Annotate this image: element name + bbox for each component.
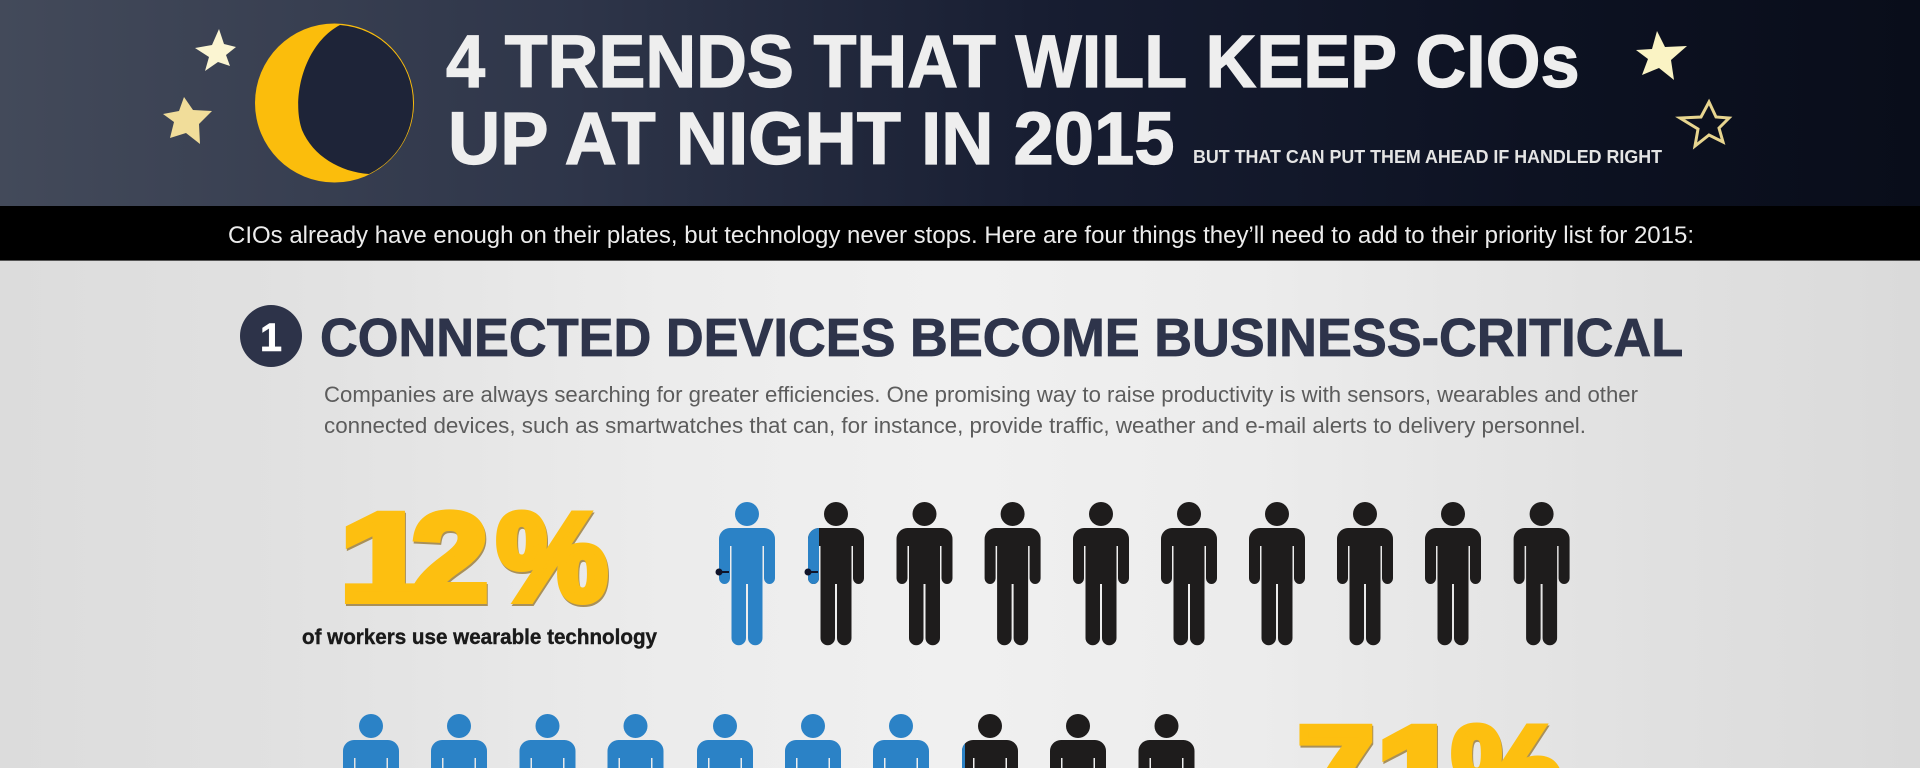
section heading: CONNECTED DEVICES BECOME BUSINESS-CRITICAL: [320, 308, 1683, 368]
subtitle: BUT THAT CAN PUT THEM AHEAD IF HANDLED RIGHT: [1193, 147, 1662, 167]
icon: star top left: [195, 29, 236, 71]
caption: wearable technology: of workers use wearable technology: [302, 626, 657, 649]
icon: star bottom left: [163, 97, 212, 144]
section description: Companies are always searching for greater efficiencies. One promising way to raise productivity is with sensors, wearables and other: [324, 382, 1638, 407]
title: UP AT NIGHT IN 2015: [448, 97, 1175, 180]
title: 4 TRENDS THAT WILL KEEP CIOs: [446, 21, 1580, 103]
section description: connected devices, such as smartwatches that can, for instance, provide traffic, weather and e-mail alerts to delivery personnel.: [324, 413, 1586, 438]
pictogram row: 12 percent of workers: [716, 502, 1570, 645]
number badge: [240, 305, 302, 367]
stat: 71%: [1298, 701, 1562, 768]
stat: 12%: 2: [412, 488, 488, 627]
stat: 12%: %: [497, 489, 607, 627]
section description: [324, 382, 1638, 438]
light background: [0, 261, 1920, 768]
title: [446, 21, 1580, 180]
pictogram row: 71 percent: [343, 714, 1194, 768]
icon: crescent moon: [255, 24, 414, 182]
number badge: 1: [260, 316, 282, 360]
icon: outlined star right: [1680, 102, 1729, 146]
stat: 12%: 1: [340, 489, 430, 627]
stat: 12%: [340, 488, 607, 627]
intro band: [0, 206, 1920, 261]
header band: [0, 0, 1920, 206]
icon: star top right: [1636, 31, 1687, 80]
intro band: CIOs already have enough on their plates, but technology never stops. Here are four things they’ll need to add to their priority list for 2015:: [228, 222, 1694, 249]
